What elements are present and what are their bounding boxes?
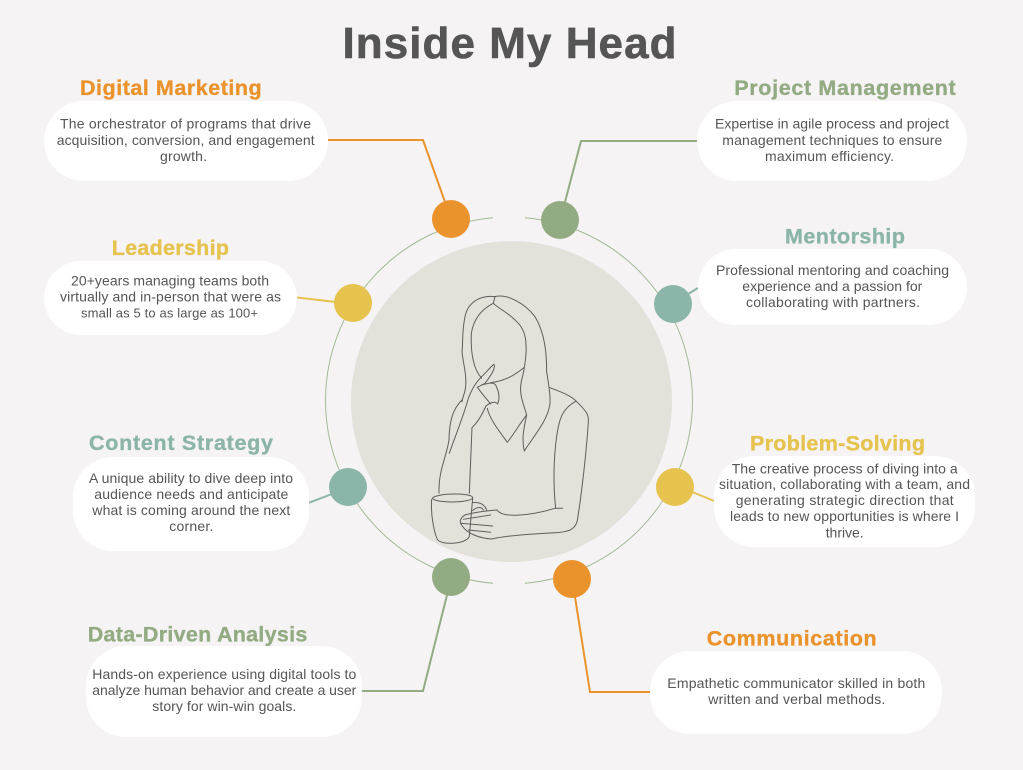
callout: digital marketing: growth. [160,148,207,164]
callout: content strategy: what is coming around the next [91,502,290,518]
callout: data-driven analysis: Data-Driven Analysis [88,622,307,646]
callout: digital marketing: The orchestrator of programs that drive [60,116,311,132]
callout: data-driven analysis: story for win-win goals. [152,698,296,714]
callout: mentorship: experience and a passion for [742,278,923,294]
callout: leadership: Leadership [112,236,229,260]
callout: project management: Project Management [734,76,956,100]
callout: communication: Communication [707,626,877,650]
callout: project management: Expertise in agile process and project [715,116,949,132]
callout: data-driven analysis: Hands-on experience using digital tools to [92,666,357,682]
callout: content strategy: Content Strategy [89,431,273,455]
callout: mentorship [654,224,967,325]
callout: leadership [44,236,372,335]
callout: data-driven analysis: analyze human behavior and create a user [92,682,357,698]
callout: leadership: virtually and in-person that were as [60,288,281,304]
callout: leadership: small as 5 to as large as 100+ [81,306,258,320]
callout: mentorship: collaborating with partners. [746,294,920,310]
callout: leadership: 20+years managing teams both [71,272,269,288]
callout: problem-solving: leads to new opportunities is where I [730,508,959,524]
callout: content strategy: corner. [169,518,213,534]
callout: problem-solving [656,432,975,547]
callout: project management [541,76,967,239]
callout: communication: Empathetic communicator skilled in both [667,675,925,691]
callout: communication [553,560,942,734]
callout: communication: written and verbal methods. [707,691,885,707]
callout: mentorship: Mentorship [785,224,905,248]
callout: digital marketing: acquisition, conversion, and engagement [57,132,315,148]
callout: digital marketing [44,76,470,238]
callout: content strategy [73,431,367,551]
callout: digital marketing: Digital Marketing [80,76,262,100]
background circle [351,241,672,562]
icon: thinking woman with mug [431,296,588,543]
callout: data-driven analysis [86,558,470,737]
callout: content strategy: A unique ability to dive deep into [89,470,293,486]
callout: problem-solving: situation, collaborating with a team, and [719,476,970,492]
callout: problem-solving: Problem-Solving [750,432,925,456]
title: Inside My Head [342,19,676,68]
callout: content strategy: audience needs and anticipate [94,486,289,502]
central head graphic [326,218,692,583]
callout: problem-solving: generating strategic direction that [736,492,954,508]
callout: project management: maximum efficiency. [765,148,894,164]
callout: project management: management techniques to ensure [722,132,943,148]
callout: mentorship: Professional mentoring and coaching [716,262,949,278]
callout: problem-solving: thrive. [826,524,864,540]
outer ring [326,218,692,583]
callout: problem-solving: The creative process of diving into a [732,460,958,476]
